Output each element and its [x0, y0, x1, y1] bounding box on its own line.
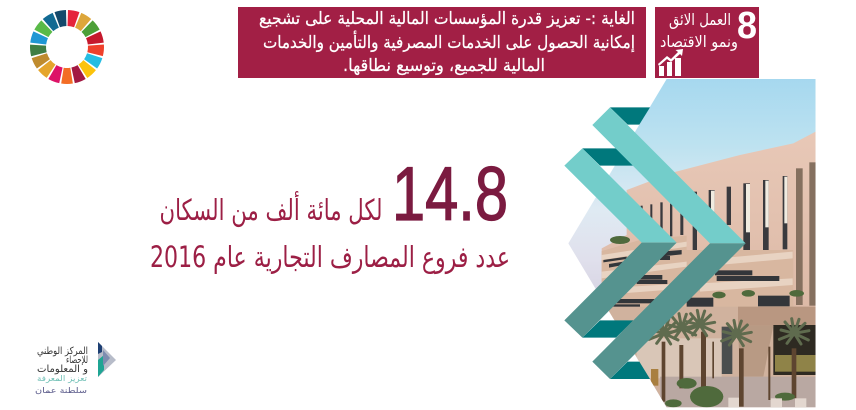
lower chevron arms [564, 243, 746, 379]
photo: bank building in hexagon [568, 79, 816, 407]
target banner: الغاية :- تعزيز قدرة المؤسسات المالية المحلية على تشجيع [259, 9, 635, 29]
organisation logo [35, 342, 116, 395]
upper chevron arms [564, 107, 746, 243]
building windows [641, 176, 787, 258]
target banner: المالية للجميع، وتوسيع نطاقها. [343, 56, 545, 76]
building upper wall [602, 132, 816, 315]
terraces [602, 236, 793, 320]
target banner: إمكانية الحصول على الخدمات المصرفية والتأمين والخدمات [263, 30, 635, 53]
logo text: تعزيز المعرفة [37, 374, 87, 383]
unit text: لكل مائة ألف من السكان [160, 190, 382, 227]
goal 8 badge: ونمو الاقتصاد [660, 32, 738, 52]
icon: growth chart [658, 49, 683, 76]
logo text: و المعلومات [37, 364, 88, 375]
goal 8 badge [655, 5, 759, 78]
palm trees [662, 332, 796, 407]
logo mark [98, 342, 116, 377]
goal 8 badge: العمل الائق [669, 10, 731, 30]
goal 8 badge: 8 [737, 5, 757, 47]
description text: عدد فروع المصارف التجارية عام 2016 [150, 240, 510, 274]
SDG colour wheel icon [26, 6, 108, 88]
logo text [35, 346, 88, 395]
target banner [238, 7, 646, 78]
logo text: المركز الوطني [37, 346, 88, 357]
headline value: 14.8 [392, 152, 508, 237]
logo text: سلطنة عمان [35, 386, 87, 395]
dark teal ribbons [582, 107, 650, 379]
lower podium [602, 307, 816, 407]
chevron arrows [564, 107, 746, 379]
logo text: للإحصاء [66, 355, 88, 366]
